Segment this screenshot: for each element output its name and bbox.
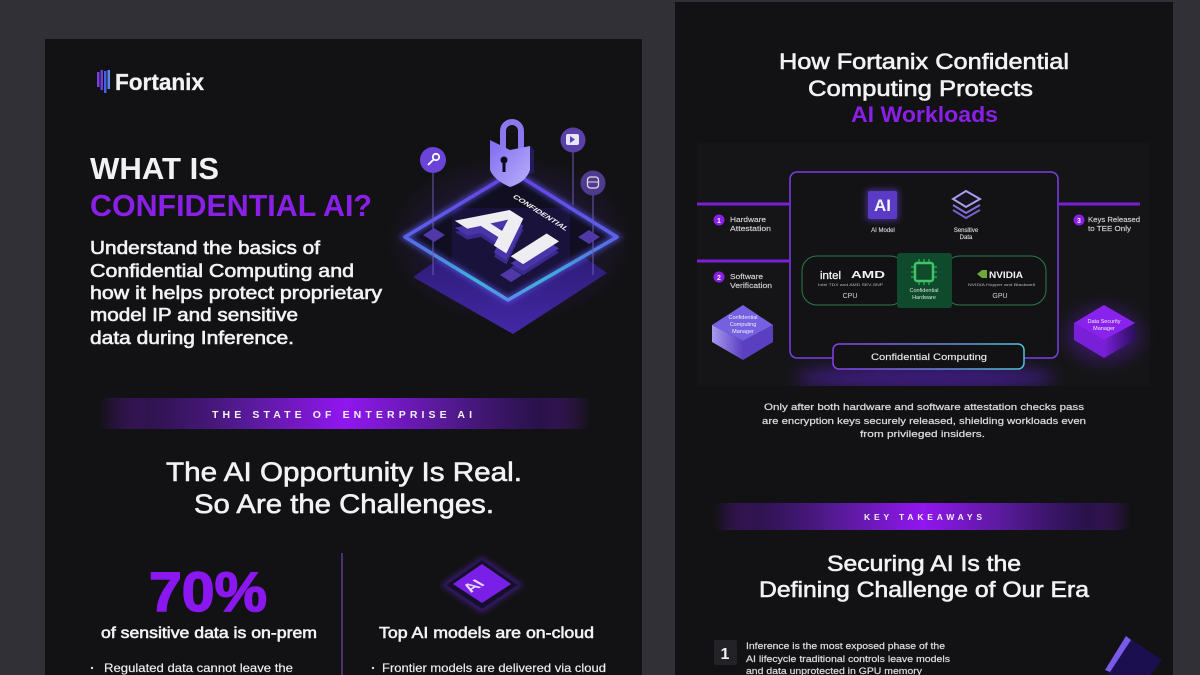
step 3: keys released: Keys Released [1088,215,1140,224]
icon: sensitive data layers [953,191,980,241]
box: CPU: CPU [843,293,857,300]
box: GPU: GPU [992,293,1008,300]
banner: the state of enterprise AI: THE STATE OF ENTERPRISE AI [212,409,472,421]
AI letters: AI [444,191,573,273]
icon: database [580,170,606,196]
icon: AI model: AI [874,196,891,215]
text block: attestation explanation: from privileged insiders. [860,429,985,440]
text block: attestation explanation: Only after both hardware and software attestation checks pass [764,402,1084,413]
heading: what is confidential AI: WHAT IS [90,151,219,186]
text block: intro: Understand the basics of [90,238,321,258]
logo: Fortanix: Fortanix [115,69,204,95]
icon: AI model: AI Model [871,228,895,234]
takeaway 1: 1 [721,646,730,663]
text block: attestation explanation: are encryption keys securely released, shielding workloads even [762,416,1086,427]
banner: key takeaways: KEY TAKEAWAYS [864,512,982,522]
text block: intro: Confidential Computing and [90,261,354,281]
icon: AI chip [441,557,523,613]
stat: 70 percent: 70% [149,560,267,623]
stat: 70 percent [101,560,317,642]
takeaway 1: AI lifecycle traditional controls leave models [746,654,951,664]
icon: key [420,147,446,173]
bullet: frontier models: Frontier models are delivered via cloud [382,661,606,675]
icon: AI model [866,189,899,234]
cube: confidential computing manager: Computing [730,322,756,328]
icon: corner chip [1105,636,1162,675]
icon: sensitive data layers: Sensitive [954,228,979,234]
box: confidential hardware: Hardware [912,295,936,301]
heading: how Fortanix: Computing Protects [808,76,1033,101]
heading: how Fortanix [779,49,1069,127]
heading: securing AI: Securing AI Is the [827,551,1021,576]
box: CPU: Intel TDX and AMD SEV-SNP [818,282,883,287]
box: confidential hardware [897,253,952,308]
heading: securing AI: Defining Challenge of Our Era [759,577,1090,602]
diagram: confidential computing architecture [697,171,1150,386]
stat: 70 percent: of sensitive data is on-prem [101,625,317,642]
step 2: software verification: Verification [730,281,772,290]
heading: how Fortanix: How Fortanix Confidential [779,49,1069,74]
box: confidential computing [833,344,1024,369]
AI letters: AI [444,202,573,284]
step 1: hardware attestation: 1 [717,218,721,225]
cube: data security manager: Manager [1093,326,1115,332]
cube: confidential computing manager: Manager [732,329,754,335]
cube: data security manager [1066,305,1142,363]
banner: key takeaways [715,503,1130,530]
bullet: regulated data: Regulated data cannot leave the [104,661,293,675]
box: GPU: NVIDIA [989,270,1023,281]
illustration: confidential AI platform: CONFIDENTIAL [510,194,571,233]
heading: the AI opportunity: The AI Opportunity Is Real. [166,457,522,487]
takeaway 1: Inference is the most exposed phase of the [746,641,945,651]
icon: video [560,128,586,152]
step 2: software verification: Software [730,272,763,281]
step 3: keys released: to TEE Only [1088,224,1131,233]
takeaway 1 [714,640,951,675]
heading: the AI opportunity: So Are the Challenges. [194,489,494,519]
step 2: software verification: 2 [717,275,721,282]
icon: AI chip: AI [458,577,489,595]
banner: the state of enterprise AI [100,398,590,429]
step 1: hardware attestation [714,214,771,233]
box: GPU [945,256,1046,305]
text block: attestation explanation [762,402,1086,440]
cube: confidential computing manager: Confidential [728,315,758,321]
illustration: confidential AI platform [385,122,635,334]
panel: what is confidential AI [45,39,642,675]
box: GPU: NVIDIA Hopper and Blackwell [968,282,1035,287]
box: CPU: AMD [851,270,885,281]
heading: securing AI [759,551,1090,602]
text block: intro: how it helps protect proprietary [90,283,382,303]
heading: the AI opportunity [166,457,522,519]
box: CPU: intel [820,270,841,282]
icon: padlock [490,122,534,187]
step 3: keys released: 3 [1077,218,1081,225]
step 3: keys released [1074,214,1140,233]
divider [341,553,343,675]
icon: sensitive data layers: Data [960,235,973,241]
panel: how Fortanix protects AI workloads [675,2,1173,675]
cube: confidential computing manager [712,305,773,360]
heading: top AI models: Top AI models are on-cloud [379,625,594,642]
text block: intro [90,238,382,348]
text block: intro: model IP and sensitive [90,305,298,325]
box: confidential hardware: Confidential [909,288,939,294]
AI letters [444,191,573,284]
step 1: hardware attestation: Hardware [730,215,766,224]
cube: data security manager: Data Security [1087,319,1121,325]
heading: what is confidential AI: CONFIDENTIAL AI? [90,188,372,223]
AI letters: AI [444,198,573,280]
heading: how Fortanix: AI Workloads [851,102,998,127]
step 1: hardware attestation: Attestation [730,224,771,233]
box: confidential computing: Confidential Computing [871,352,987,363]
box: CPU [802,256,905,305]
step 2: software verification [714,272,772,290]
text block: intro: data during Inference. [90,328,294,348]
heading: what is confidential AI [90,151,372,223]
